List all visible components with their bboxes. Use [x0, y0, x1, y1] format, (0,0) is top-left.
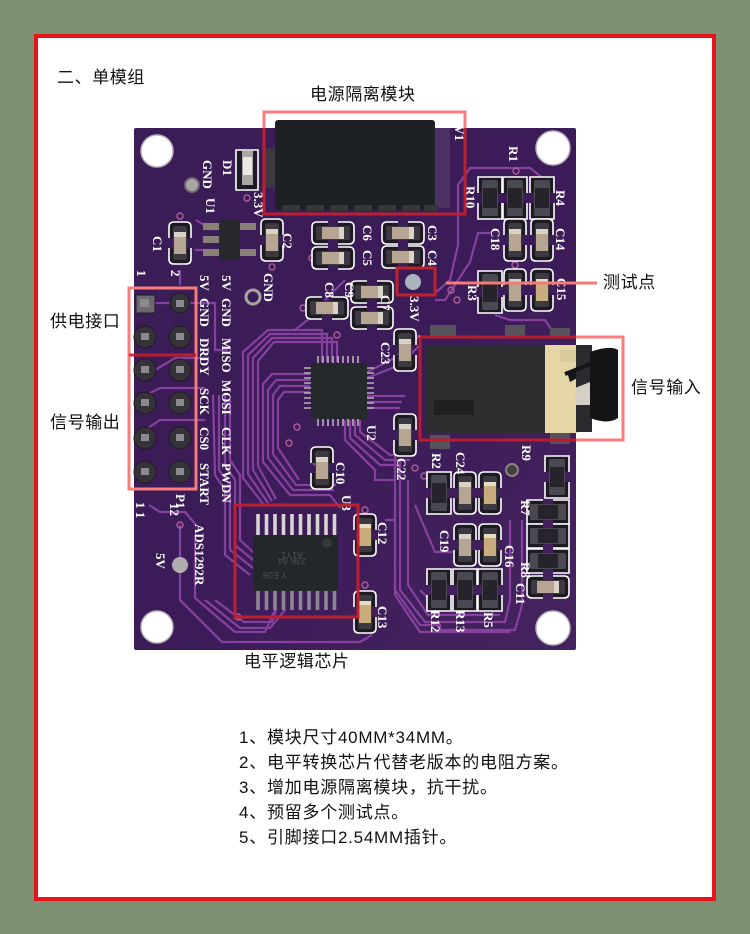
highlight: signal input jack — [420, 337, 623, 440]
label: level logic chip: 电平逻辑芯片 — [244, 652, 350, 671]
silkscreen labels: PWDN — [219, 463, 234, 503]
heading: section title: 二、单模组 — [57, 68, 145, 87]
silkscreen labels: U1 — [203, 198, 218, 214]
silkscreen labels: GND — [219, 298, 234, 327]
text block: feature list: 1、模块尺寸40MM*34MM。 — [239, 728, 464, 747]
silkscreen labels: C6 — [360, 225, 375, 241]
silkscreen labels: R12 — [428, 610, 443, 632]
silkscreen labels: GND — [200, 160, 215, 189]
silkscreen labels: 12 — [167, 503, 182, 516]
chip: LDO U1 — [203, 220, 256, 260]
silkscreen labels: GND — [261, 273, 276, 302]
silkscreen labels: MOSI — [219, 380, 234, 415]
silkscreen labels: 3.3V — [407, 296, 422, 322]
silkscreen labels: C3 — [425, 225, 440, 241]
silkscreen labels: R7 — [518, 500, 533, 516]
silkscreen labels: C18 — [488, 228, 503, 251]
silkscreen labels: C24 — [453, 452, 468, 475]
silkscreen labels: C7 — [378, 295, 393, 311]
capacitors and resistors — [169, 177, 570, 633]
silkscreen labels: DRDY — [197, 338, 212, 376]
silkscreen labels: C14 — [553, 228, 568, 251]
level shifter chip U3: Y E08 — [263, 570, 287, 580]
silkscreen labels: C23 — [378, 342, 393, 365]
board: purple PCB — [133, 125, 576, 650]
text block: feature list: 5、引脚接口2.54MM插针。 — [239, 828, 457, 847]
highlight boxes — [129, 112, 623, 617]
silkscreen labels: 2 — [168, 270, 183, 276]
silkscreen labels: R5 — [481, 612, 496, 628]
text block: feature list — [239, 728, 569, 847]
highlight: level shifter chip — [235, 505, 358, 617]
test points — [172, 178, 518, 573]
silkscreen labels: P1 — [173, 494, 188, 508]
label: signal output: 信号输出 — [50, 413, 120, 432]
silkscreen labels: C22 — [394, 458, 409, 480]
text block: feature list: 2、电平转换芯片代替老版本的电阻方案。 — [239, 753, 569, 772]
silkscreen labels: 3.3V — [251, 192, 266, 218]
silkscreen labels: C11 — [513, 583, 528, 605]
silkscreen labels: R1 — [506, 146, 521, 162]
highlight: test point — [397, 268, 435, 295]
silkscreen labels: 5V — [219, 275, 234, 292]
silkscreen labels: START — [197, 463, 212, 505]
label: power interface: 供电接口 — [50, 312, 120, 331]
pin headers — [134, 293, 191, 483]
label: signal input: 信号输入 — [631, 378, 701, 397]
silkscreen labels: C10 — [333, 462, 348, 484]
level shifter chip U3: A1Y1 — [281, 550, 303, 560]
silkscreen labels: C19 — [437, 530, 452, 553]
silkscreen labels: GND — [197, 298, 212, 327]
label: power isolation module: 电源隔离模块 — [310, 85, 416, 104]
highlight: power module — [264, 112, 465, 214]
audio jack signal input connector — [426, 345, 618, 433]
silkscreen labels: 1 — [134, 270, 149, 276]
silkscreen labels: R9 — [519, 445, 534, 461]
silkscreen labels: C13 — [375, 606, 390, 629]
silkscreen labels: 1 1 — [133, 502, 148, 518]
silkscreen labels — [133, 125, 569, 633]
text block: feature list: 3、增加电源隔离模块，抗干扰。 — [239, 778, 498, 797]
silkscreen labels: ADS1292R — [192, 524, 207, 586]
level shifter chip U3 — [253, 514, 338, 610]
silkscreen labels: R2 — [429, 453, 444, 469]
label: test point: 测试点 — [603, 273, 656, 292]
leader line: test point — [446, 282, 597, 284]
silkscreen labels: C1 — [150, 236, 165, 252]
silkscreen labels: C2 — [280, 233, 295, 249]
LED D1 — [236, 148, 276, 190]
silkscreen labels: D1 — [220, 160, 235, 176]
mounting holes — [141, 131, 570, 645]
silkscreen labels: R3 — [465, 285, 480, 301]
level shifter chip U3: 23K 84 — [278, 556, 306, 566]
silkscreen labels: 5V — [197, 275, 212, 292]
silkscreen labels: R8 — [518, 562, 533, 578]
silkscreen labels: 5V — [153, 553, 168, 570]
silkscreen labels: C8 — [322, 282, 337, 298]
main chip ADS1292R — [304, 356, 374, 426]
silkscreen labels: C9 — [342, 282, 357, 298]
text block: feature list: 4、预留多个测试点。 — [239, 803, 409, 822]
highlight: supply and output pins — [129, 288, 196, 489]
silkscreen labels: CLK — [219, 427, 234, 456]
silkscreen labels: R13 — [453, 610, 468, 633]
silkscreen labels: MISO — [219, 338, 234, 373]
traces — [145, 168, 555, 642]
isolated power module — [275, 120, 450, 211]
silkscreen labels: C15 — [554, 278, 569, 301]
silkscreen labels: C16 — [502, 545, 517, 568]
silkscreen labels: R10 — [463, 186, 478, 208]
silkscreen labels: C12 — [375, 522, 390, 544]
silkscreen labels: U2 — [364, 425, 379, 441]
silkscreen labels: C4 — [425, 250, 440, 266]
silkscreen labels: SCK — [197, 388, 212, 416]
silkscreen labels: CS0 — [197, 427, 212, 450]
silkscreen labels: R4 — [553, 190, 568, 206]
silkscreen labels: V1 — [452, 125, 467, 141]
silkscreen labels: U3 — [339, 495, 354, 511]
silkscreen labels: C5 — [360, 250, 375, 266]
